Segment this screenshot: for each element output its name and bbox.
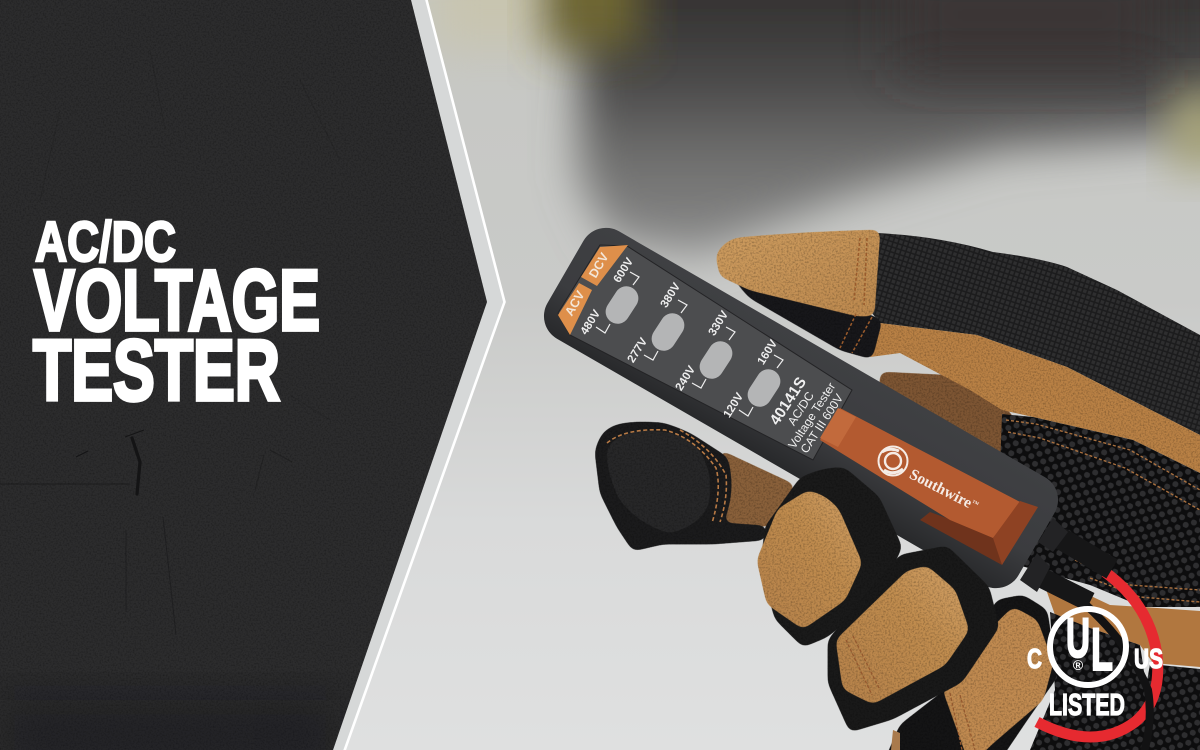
tan palm strip: [1040, 572, 1200, 667]
glove: back of hand and upper finger: [716, 230, 1200, 473]
tester body: [534, 218, 1068, 598]
finger 3: [885, 595, 1057, 750]
black lead sleeve: [1038, 576, 1090, 602]
indicator window pair: 480V / 600V: 480V: [579, 308, 603, 337]
finger 1: [757, 468, 902, 647]
C mark: C: [1027, 643, 1042, 674]
indicator window pair: 240V / 330V: 240V: [674, 364, 698, 393]
indicator window pair: 480V / 600V: [579, 256, 643, 337]
UL letters: L: [1091, 616, 1113, 683]
red lead: [1037, 572, 1158, 737]
badge: UL listed: [1027, 606, 1163, 722]
label plate: [558, 245, 852, 460]
model text: AC/DC: [785, 389, 817, 428]
thumb leather: [607, 431, 710, 533]
grunge texture: [0, 50, 340, 750]
finger 2: [828, 546, 999, 732]
indicator window pair: 480V / 600V: 600V: [612, 256, 636, 285]
indicator window pair: 120V / 160V: 160V: [756, 338, 780, 367]
indicator window pair: 240V / 330V: 330V: [707, 309, 731, 338]
title line: AC/DC: AC/DC: [35, 210, 176, 274]
grip stitching: [1006, 420, 1200, 602]
indicator window pair: 277V / 380V: 380V: [659, 281, 683, 310]
indicator window pair: 120V / 160V: 120V: [722, 391, 746, 420]
ACV tab: [558, 283, 592, 335]
black knit back of hand: [872, 233, 1200, 435]
brown slider cap: [820, 408, 1038, 565]
indicator window pair: 277V / 380V: 277V: [626, 336, 650, 365]
darker palm behind tester: [880, 372, 1040, 470]
white chevron outline: [344, 0, 504, 750]
thumb stitching: [607, 430, 726, 523]
Southwire logo: [878, 446, 908, 476]
lower black palm: [1135, 664, 1200, 750]
model text: 40141S: [767, 374, 810, 428]
dark palm under UL badge: [1030, 612, 1156, 750]
indicator window pair: 277V / 380V: [626, 281, 689, 365]
light band beside chevron: [333, 0, 505, 750]
connector blocks: [1020, 518, 1068, 592]
panel: dark grunge chevron: [0, 0, 505, 750]
UL ring: [1050, 609, 1126, 685]
glove: textured grip palm: [1000, 414, 1200, 750]
black lead: [1085, 604, 1150, 750]
brown thumb base: [720, 450, 795, 530]
UL letters: U: [1066, 606, 1090, 669]
DCV tab: DCV: [586, 250, 612, 280]
test leads and connectors: [1020, 518, 1158, 750]
ACV tab: ACV: [562, 288, 588, 318]
tan fingertip: [716, 230, 880, 316]
glove: three lower fingers: [757, 468, 1057, 750]
model text: Voltage Tester: [785, 380, 838, 451]
Southwire wordmark: Southwire: [907, 466, 975, 512]
dark underside of fingertip: [722, 268, 882, 359]
glove: lower thumb: [595, 422, 795, 551]
stitching on fingertip: [840, 238, 872, 353]
title line: VOLTAGE: VOLTAGE: [34, 253, 320, 349]
tan wrist band: [870, 323, 1200, 473]
LISTED label: LISTED: [1049, 687, 1125, 722]
indicator window pair: 120V / 160V: [722, 338, 785, 420]
thumb outer black: [595, 422, 767, 551]
US mark: US: [1134, 643, 1163, 674]
device: voltage tester: [534, 218, 1068, 598]
title: [33, 210, 320, 419]
indicator window pair: 240V / 330V: [674, 309, 737, 393]
chevron fill: [0, 0, 487, 750]
Southwire wordmark: ™: [970, 498, 980, 509]
DCV tab: [581, 245, 628, 286]
title line: TESTER: TESTER: [33, 323, 280, 419]
registered mark: ®: [1073, 657, 1084, 673]
model text: CAT III 600V: [798, 391, 846, 456]
red lead sleeve: [1060, 538, 1112, 569]
model text: [767, 374, 846, 456]
